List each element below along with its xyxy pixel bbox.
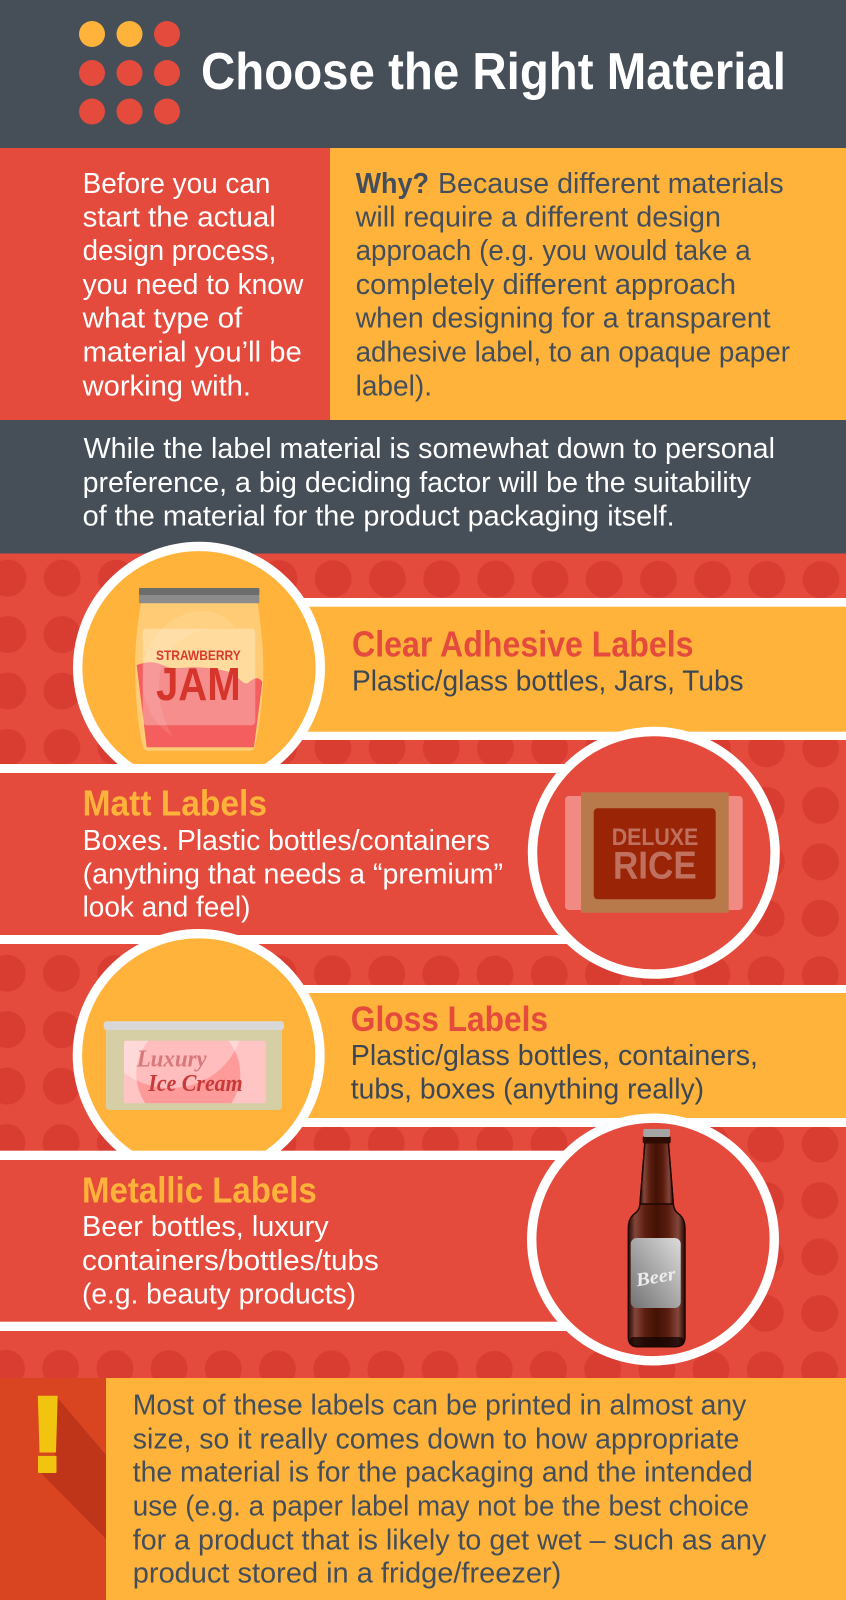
circle: rice box: [532, 732, 775, 974]
icon: exclamation mark: [38, 1396, 106, 1539]
icon: beer bottle: [628, 1129, 685, 1347]
title: Choose the Right Material: [201, 43, 786, 101]
text block: gloss labels: tubs, boxes (anything really): [351, 1073, 704, 1105]
circle: beer bottle: [532, 1118, 774, 1361]
text block: warning note: Most of these labels can be printed in almost any: [133, 1389, 747, 1421]
text block: intro: you need to know: [83, 269, 304, 301]
text block: intro: design process,: [83, 235, 276, 267]
text block: why: approach (e.g. you would take a: [356, 235, 752, 267]
bottle label text: Beer: [633, 1264, 678, 1292]
text block: metallic labels: Metallic Labels: [82, 1169, 317, 1210]
jar label text: STRAWBERRY: [156, 647, 241, 663]
jar label text: JAM: [156, 658, 241, 710]
rice label text: [612, 824, 698, 887]
text block: clear adhesive labels: [352, 624, 744, 698]
text block: why: adhesive label, to an opaque paper: [356, 336, 790, 368]
text block: gloss labels: Gloss Labels: [351, 1000, 548, 1039]
text block: gloss labels: Plastic/glass bottles, containers,: [351, 1040, 758, 1072]
circle: ice cream tub: [77, 934, 320, 1176]
text block: intro: material you’ll be: [83, 336, 302, 368]
circle: jam jar: [78, 546, 320, 789]
band: gloss labels: [250, 985, 846, 1127]
text block: warning note: [133, 1389, 767, 1590]
panel: why: [330, 148, 846, 420]
text block: why: Because different materials: [438, 168, 784, 200]
text block: matt labels: Matt Labels: [83, 782, 267, 823]
icon: dot grid: [79, 21, 180, 124]
text block: matt labels: [83, 782, 503, 924]
text block: intro: Before you can: [83, 168, 270, 200]
text block: matt labels: Boxes. Plastic bottles/containers: [83, 825, 490, 857]
text block: why: [355, 168, 790, 402]
text block: why: Why?: [356, 168, 429, 200]
text block: intro: start the actual: [83, 202, 276, 234]
text block: warning note: for a product that is likely to get wet – such as any: [133, 1524, 767, 1556]
text block: metallic labels: (e.g. beauty products): [82, 1278, 356, 1310]
tub label text: [136, 1047, 243, 1097]
text block: warning note: use (e.g. a paper label may not be the best choice: [133, 1490, 749, 1522]
text block: statement: of the material for the product packaging itself.: [83, 501, 675, 533]
text block: statement: preference, a big deciding factor will be the suitability: [83, 467, 751, 499]
text block: metallic labels: Beer bottles, luxury: [82, 1211, 329, 1243]
band: clear adhesive labels: [250, 598, 846, 740]
dotted background: [0, 554, 846, 1378]
band: metallic labels: [0, 1151, 700, 1331]
rice label text: DELUXE: [612, 824, 698, 851]
text block: statement: [83, 433, 775, 533]
panel: warning note: [0, 1378, 846, 1600]
text block: intro: working with.: [82, 370, 251, 402]
tub label text: Luxury: [136, 1047, 207, 1073]
text block: intro: [82, 168, 304, 402]
text block: warning note: the material is for the packaging and the intended: [133, 1457, 753, 1489]
tub label text: Ice Cream: [147, 1071, 243, 1097]
text block: warning note: product stored in a fridge/freezer): [133, 1558, 561, 1590]
text block: why: completely different approach: [356, 269, 736, 301]
text block: clear adhesive labels: Clear Adhesive Labels: [352, 624, 694, 665]
band: matt labels: [0, 764, 700, 944]
text block: why: will require a different design: [355, 202, 721, 234]
rice label text: RICE: [613, 844, 697, 887]
panel: statement: [0, 420, 846, 554]
icon: rice box: [565, 792, 743, 913]
text block: statement: While the label material is somewhat down to personal: [84, 433, 775, 465]
text block: warning note: size, so it really comes down to how appropriate: [133, 1423, 739, 1455]
header panel: [0, 0, 846, 148]
text block: clear adhesive labels: Plastic/glass bottles, Jars, Tubs: [352, 666, 744, 698]
text block: matt labels: look and feel): [83, 892, 250, 924]
panel: intro: [0, 148, 330, 420]
text block: why: when designing for a transparent: [355, 302, 771, 334]
icon: jam jar: [135, 588, 263, 751]
text block: metallic labels: [82, 1169, 379, 1310]
icon: ice cream tub: [104, 1021, 284, 1110]
text block: intro: what type of: [82, 302, 243, 334]
text block: metallic labels: containers/bottles/tubs: [82, 1245, 379, 1277]
text block: gloss labels: [351, 1000, 758, 1105]
text block: matt labels: (anything that needs a “premium”: [83, 858, 503, 890]
text block: why: label).: [356, 370, 432, 402]
